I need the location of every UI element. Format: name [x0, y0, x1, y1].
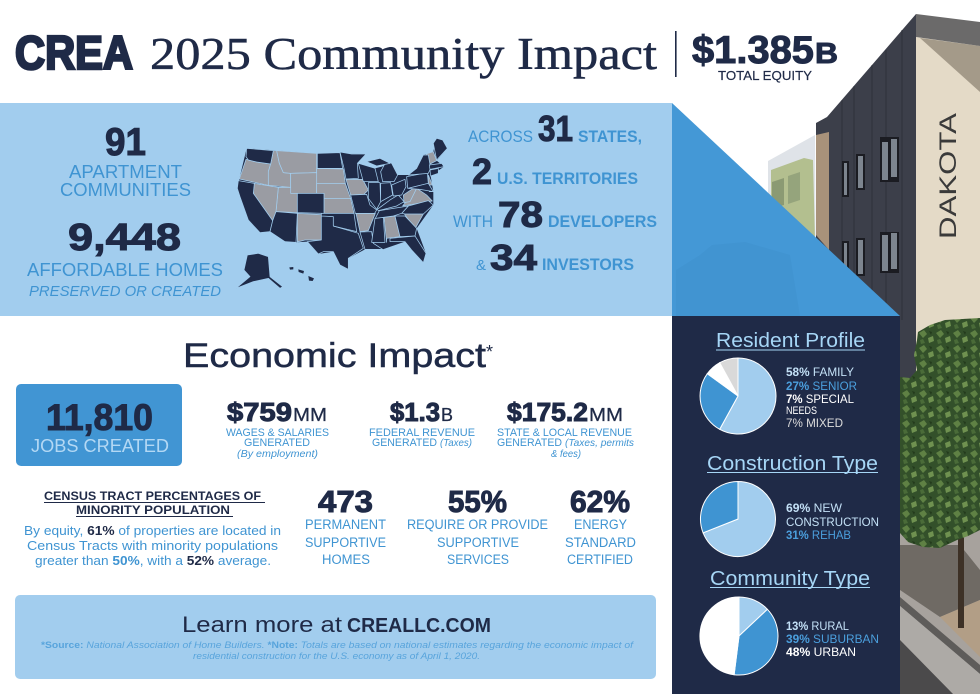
stat: supportive homes: HOMES [322, 552, 370, 567]
stat: apartment communities [60, 121, 191, 200]
callout: jobs created: 11,810 [46, 397, 153, 438]
callout: jobs created: JOBS CREATED [31, 436, 169, 456]
roof band [916, 14, 980, 46]
stat: energy certified: ENERGY [574, 517, 627, 532]
legend: resident profile [786, 365, 857, 430]
heading: Economic Impact: * [486, 342, 493, 362]
stat: supportive services: REQUIRE OR PROVIDE [407, 517, 548, 532]
panel: community type [700, 568, 879, 675]
legend: construction type: 69% NEW [786, 501, 843, 515]
panel: learn more: *Source: National Association of Home Builders. *Note: Totals are based on national estimates regarding the economic impact of [41, 640, 634, 651]
stat: supportive homes: SUPPORTIVE [305, 535, 386, 550]
stat: states: 31 [538, 108, 573, 149]
stat: federal revenue: B [441, 405, 453, 425]
legend: community type: 48% URBAN [786, 645, 856, 659]
logo: CREA: CREA [15, 26, 133, 79]
stat: state and local revenue: & fees) [551, 448, 581, 460]
stat: state and local revenue: $175.2 [507, 397, 588, 427]
tree [900, 318, 980, 628]
stat: state and local revenue: STATE & LOCAL REVENUE [497, 427, 632, 439]
stat: state and local revenue: GENERATED [497, 437, 562, 449]
pie chart: construction type [700, 482, 775, 556]
legend: community type [786, 619, 879, 659]
stat: state and local revenue [497, 397, 635, 460]
text block: census tract percentages: CENSUS TRACT PERCENTAGES OF [44, 491, 261, 503]
stat: state and local revenue: MM [589, 405, 623, 425]
panel: learn more: Learn more at [182, 612, 342, 637]
heading: Economic Impact: Economic Impact [183, 337, 487, 375]
stat: territories: 2 [472, 151, 492, 192]
panel: learn more: CREALLC.COM [347, 615, 491, 637]
stat: federal revenue: FEDERAL REVENUE [369, 427, 475, 439]
stat: affordable homes: 9,448 [68, 217, 181, 259]
panel: learn more: residential construction for the U.S. economy as of April 1, 2020. [193, 651, 480, 662]
pie chart: resident profile [700, 358, 776, 434]
stat: wages and salaries [226, 397, 329, 460]
pie chart: community type [700, 597, 778, 675]
stat: investors [476, 237, 634, 278]
stat: total equity: $1.385 [692, 29, 814, 72]
legend: resident profile: 7% SPECIAL [786, 392, 854, 406]
stat: supportive homes: 473 [318, 484, 373, 519]
stat: affordable homes: PRESERVED OR CREATED [29, 283, 221, 300]
stat: supportive services [407, 484, 548, 567]
cream wall [916, 37, 980, 520]
triangle overlay [672, 103, 900, 316]
green neighbouring building [768, 135, 816, 300]
stat: developers: DEVELOPERS [548, 213, 657, 231]
text block: census tract percentages: MINORITY POPULATION [76, 505, 230, 517]
text block: census tract percentages: Census Tracts with minority populations [27, 538, 279, 553]
divider [675, 31, 677, 77]
legend: resident profile: NEEDS [786, 405, 817, 417]
stat: energy certified [565, 484, 636, 567]
stat: developers: 78 [498, 194, 543, 235]
legend: resident profile: 7% MIXED [786, 416, 843, 430]
stat: supportive homes: PERMANENT [305, 517, 386, 532]
stat: states: ACROSS [468, 127, 533, 146]
stat: federal revenue: $1.3 [390, 397, 440, 427]
heading: resident profile: Resident Profile [716, 330, 865, 352]
navy panel [672, 316, 900, 694]
stat: state and local revenue: (Taxes, permits [565, 437, 635, 449]
stat: wages and salaries: MM [293, 405, 327, 425]
panel: construction type [700, 453, 879, 556]
legend: construction type [786, 501, 879, 542]
map: United States [236, 138, 447, 288]
stat: federal revenue: GENERATED [372, 437, 437, 449]
building photo [768, 14, 980, 694]
legend: construction type: CONSTRUCTION [786, 515, 879, 529]
stat: territories: U.S. TERRITORIES [497, 170, 638, 188]
stat: energy certified: 62% [570, 484, 630, 519]
title: 2025 Community Impact [150, 29, 658, 79]
stat: investors: INVESTORS [542, 256, 634, 274]
stat: total equity [692, 29, 838, 83]
stat: investors: 34 [490, 237, 537, 278]
stat: wages and salaries: (By employment) [237, 448, 318, 460]
callout: jobs created [16, 384, 182, 466]
legend: resident profile: 27% SENIOR [786, 379, 857, 393]
stat: developers [453, 194, 657, 235]
stat: affordable homes: AFFORDABLE HOMES [27, 260, 223, 280]
heading: community type: Community Type [710, 568, 870, 590]
heading: construction type: Construction Type [707, 453, 878, 475]
panel: learn more [15, 595, 656, 679]
stat: apartment communities: APARTMENT [69, 162, 182, 182]
dark metal siding [816, 14, 916, 380]
stat: states: STATES, [578, 128, 642, 146]
stat: total equity: B [815, 38, 838, 70]
stat: developers: WITH [453, 212, 493, 231]
stat: investors: & [476, 257, 486, 274]
stat: states [468, 108, 642, 149]
legend: community type: 39% SUBURBAN [786, 632, 879, 646]
stat: supportive services: 55% [448, 484, 507, 519]
legend: resident profile: 58% FAMILY [786, 365, 854, 379]
stat: energy certified: STANDARD [565, 535, 636, 550]
stat: supportive homes [305, 484, 386, 567]
stat: total equity: TOTAL EQUITY [718, 68, 812, 83]
legend: construction type: 31% REHAB [786, 528, 851, 542]
stat: federal revenue: (Taxes) [440, 437, 472, 449]
pavement [900, 500, 980, 694]
stat: federal revenue [369, 397, 475, 449]
text block: census tract percentages [24, 491, 281, 568]
windows [842, 137, 899, 277]
stat: apartment communities: 91 [105, 121, 146, 164]
stat: apartment communities: COMMUNITIES [60, 180, 191, 200]
text block: census tract percentages: greater than 50%, with a 52% average. [35, 553, 271, 568]
text block: census tract percentages: By equity, 61% of properties are located in [24, 523, 281, 538]
panel: resident profile [700, 330, 865, 434]
stat: affordable homes [27, 217, 223, 300]
panel: portfolio summary band [0, 103, 672, 316]
tan strip [816, 132, 829, 250]
stat: supportive services: SUPPORTIVE [437, 535, 519, 550]
stat: wages and salaries: GENERATED [244, 437, 310, 449]
stat: energy certified: CERTIFIED [567, 552, 633, 567]
stat: supportive services: SERVICES [447, 552, 509, 567]
stat: wages and salaries: $759 [227, 397, 292, 427]
stat: wages and salaries: WAGES & SALARIES [226, 427, 329, 439]
legend: community type: 13% RURAL [786, 619, 849, 633]
building name sign: DAKOTA [935, 113, 962, 239]
stat: territories [472, 151, 638, 192]
